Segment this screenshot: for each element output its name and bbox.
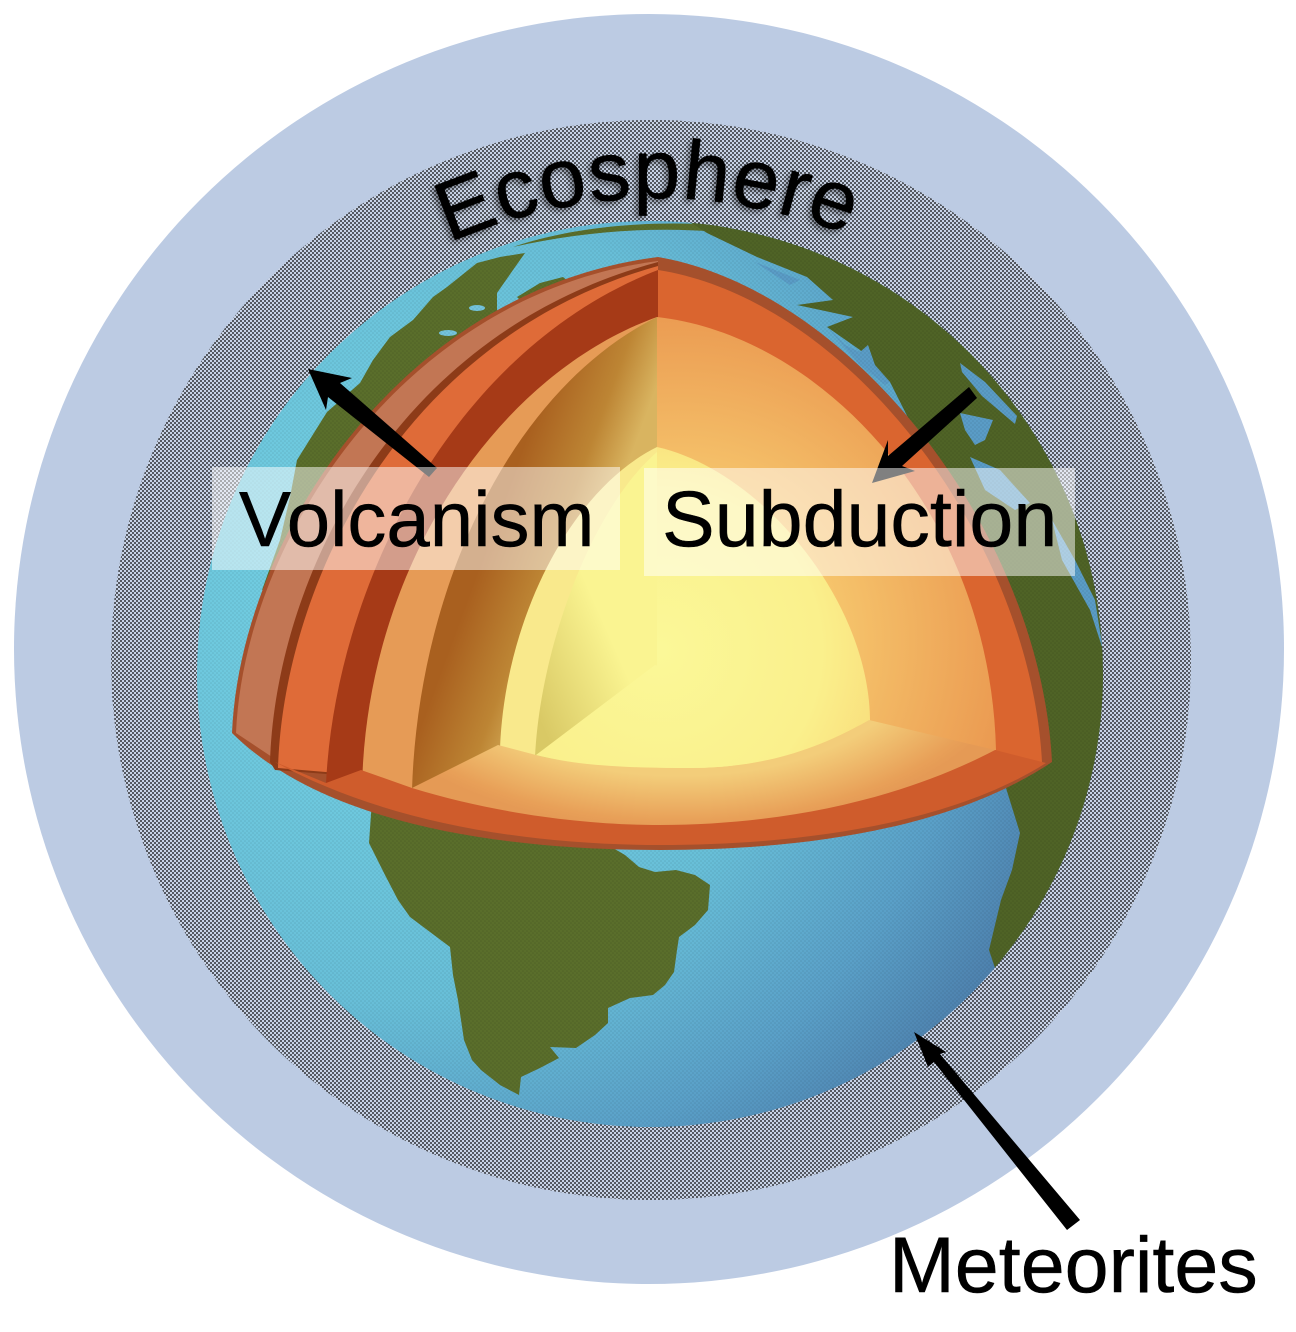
arrow: volcanism <box>308 369 437 477</box>
planet earth globe <box>197 215 1130 1127</box>
right wall: core <box>657 447 870 790</box>
continent: south america <box>369 800 710 1095</box>
left wall: shaded mantle <box>412 317 657 800</box>
left wall: crust <box>236 261 658 790</box>
label: meteorites: Meteorites <box>889 1220 1258 1309</box>
right wall: mantle <box>657 317 996 800</box>
left wall: upper mantle orange <box>278 266 658 800</box>
left wall: dark seam <box>270 262 658 800</box>
ocean patches: asian seas <box>755 262 1103 650</box>
label box: volcanism <box>212 467 620 570</box>
continent: islands along the crust <box>517 277 566 299</box>
continent: thin northern coast <box>513 224 720 247</box>
ecosphere label: Ecosphere <box>429 138 854 246</box>
label: subduction: Subduction <box>662 474 1057 563</box>
continent: eastern landmass <box>690 215 1130 968</box>
left wall: inner core <box>535 452 657 800</box>
arrow: subduction <box>872 387 977 483</box>
outer crust edge <box>232 257 1052 850</box>
dotted ecosphere ring <box>111 120 1191 1200</box>
ocean patches: northern lakes <box>439 305 485 336</box>
label box: subduction <box>644 468 1075 576</box>
arrow: meteorites <box>914 1032 1080 1230</box>
right wall: crust band <box>658 270 1042 800</box>
left wall: lower mantle <box>362 317 657 800</box>
earth cutaway interior <box>232 257 1052 850</box>
left wall: dark-red layer <box>326 270 658 800</box>
continent: north-west landmass <box>262 253 525 590</box>
floor: core <box>536 665 869 768</box>
halftone over globe <box>197 221 1103 1127</box>
left wall: outer core <box>500 447 657 800</box>
label: volcanism: Volcanism <box>239 475 594 563</box>
floor: mantle <box>412 720 995 825</box>
floor: crust band <box>275 750 1046 845</box>
continents <box>262 215 1130 1095</box>
